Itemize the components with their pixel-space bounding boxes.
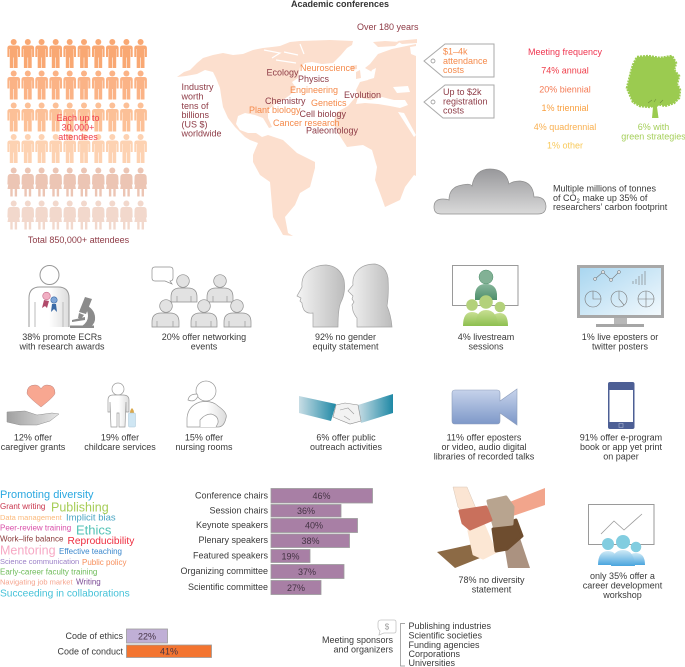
attendees per conference label: attendees [58, 132, 98, 142]
caregiver caption: 12% offer [14, 432, 52, 442]
word cloud: career topics: Navigating job market [0, 578, 73, 586]
meeting frequency list: 1% other [547, 140, 583, 150]
e-program caption: 91% offer e-program [580, 432, 662, 442]
carbon footprint text: researchers’ carbon footprint [553, 202, 668, 212]
icon: head profiles [297, 264, 392, 327]
sponsors label: and organizers [333, 644, 393, 654]
nursing caption: 15% offer [185, 432, 223, 442]
bar chart: women representation: Scientific committee [188, 582, 268, 592]
livestream caption [458, 332, 514, 352]
career workshop caption: only 35% offer a [590, 571, 655, 581]
bar chart: women representation: 46% [312, 491, 331, 501]
icon: career workshop [588, 504, 654, 566]
video caption: or video, audio digital [441, 442, 527, 452]
diversity caption: statement [472, 584, 512, 594]
meeting frequency list [528, 47, 603, 150]
bar chart: women representation: Featured speakers [193, 550, 268, 560]
bar chart: women representation: 19% [281, 552, 300, 562]
industry value label: Industry [182, 82, 214, 92]
diversity caption [458, 575, 525, 594]
bar chart: women representation: Session chairs [209, 506, 268, 516]
bar chart: women representation: Organizing committee [180, 566, 268, 576]
word cloud: career topics: Early-career faculty training [0, 568, 97, 576]
word cloud: career topics: Succeeding in collaborations [0, 588, 130, 600]
disciplines on map [249, 63, 381, 136]
bar chart: women representation: 27% [287, 583, 305, 593]
awards caption: with research awards [18, 342, 105, 352]
world map [177, 39, 417, 236]
duration label: Over 180 years [357, 22, 419, 32]
bar chart: women representation: 37% [298, 567, 316, 577]
meeting frequency list: 20% biennial [539, 84, 591, 94]
carbon footprint text: Multiple millions of tonnes [553, 184, 657, 194]
word cloud: career topics: Ethics [76, 522, 112, 538]
networking caption: 20% offer networking [162, 332, 246, 342]
outreach caption: 6% offer public [316, 432, 376, 442]
carbon footprint text [553, 184, 668, 212]
disciplines on map: Evolution [344, 90, 381, 100]
word cloud: career topics: Peer-review training [0, 524, 71, 532]
sponsors list: Publishing industries [408, 621, 492, 631]
attendees per conference label [56, 113, 100, 142]
outreach caption [310, 432, 383, 452]
video caption: 11% offer eposters [447, 432, 522, 442]
nursing caption: nursing rooms [175, 442, 233, 452]
bar chart: women representation: Conference chairs [195, 490, 268, 500]
icon: livestream [452, 266, 518, 326]
disciplines on map: Genetics [311, 98, 347, 108]
industry value label [180, 82, 222, 138]
icon: awards scientist [29, 266, 95, 328]
meeting frequency list: Meeting frequency [528, 47, 603, 57]
eposters caption: 1% live eposters or [582, 332, 658, 342]
icon: child with bottle [108, 383, 136, 427]
disciplines on map: Ecology [266, 68, 299, 78]
gender equity caption: equity statement [312, 342, 379, 352]
disciplines on map: Plant biology [249, 105, 301, 115]
icon: dollar speech bubble: $ [385, 622, 390, 632]
e-program caption: on paper [603, 452, 639, 462]
nursing caption [175, 432, 233, 452]
sponsors list: Corporations [408, 649, 461, 659]
bar chart: women representation [180, 488, 372, 594]
bar chart: women representation: Plenary speakers [198, 535, 268, 545]
carbon footprint text: make up 35% of [580, 193, 648, 203]
meeting frequency list: 1% triennial [541, 103, 589, 113]
bar chart: women representation: 40% [305, 520, 323, 530]
tag: registration costs: costs [443, 106, 465, 116]
caregiver caption [1, 432, 66, 452]
industry value label: billions [182, 110, 210, 120]
livestream caption: 4% livestream [458, 332, 514, 342]
industry value label: worth [180, 92, 204, 102]
awards caption: 38% promote ECRs [22, 332, 102, 342]
meeting frequency list: 74% annual [541, 66, 589, 76]
caregiver caption: caregiver grants [1, 442, 66, 452]
sponsors label [322, 635, 393, 654]
icon: networking people [152, 267, 251, 327]
meeting frequency list: 4% quadrennial [534, 122, 596, 132]
bar chart: code of ethics and conduct: Code of ethics [65, 631, 123, 641]
bar chart: code of ethics and conduct: 41% [160, 646, 178, 656]
industry value label: tens of [182, 101, 209, 111]
icon: video camera [452, 389, 517, 425]
icon: clasped hands [437, 487, 545, 568]
bar chart: code of ethics and conduct: Code of conduct [57, 646, 123, 656]
tag: attendance costs: costs [443, 65, 465, 75]
awards caption [18, 332, 105, 352]
disciplines on map: Physics [298, 74, 330, 84]
word cloud: career topics [0, 489, 135, 600]
word cloud: career topics: Promoting diversity [0, 489, 94, 501]
eposters caption: twitter posters [592, 342, 649, 352]
attendees per conference label: Each up to [56, 113, 100, 123]
green strategies label [621, 122, 685, 142]
networking caption [162, 332, 246, 352]
bar chart: code of ethics and conduct [57, 629, 212, 658]
bar chart: women representation: Keynote speakers [196, 520, 268, 530]
video caption: libraries of recorded talks [434, 452, 535, 462]
sponsors list: Scientific societies [408, 630, 483, 640]
icon: nursing mother [187, 381, 226, 427]
attendees per conference label: 30,000+ [62, 122, 94, 132]
e-program caption [580, 432, 663, 462]
icon: dollar speech bubble [378, 620, 396, 635]
diversity caption: 78% no diversity [458, 575, 525, 585]
childcare caption: childcare services [84, 442, 156, 452]
e-program caption: book or app yet print [580, 442, 663, 452]
word cloud: career topics: Data management [0, 513, 63, 522]
bar chart: women representation: 36% [297, 506, 315, 516]
icon: handshake [299, 394, 393, 424]
industry value label: worldwide [180, 128, 222, 138]
tag: registration costs: registration [443, 96, 488, 106]
disciplines on map: Chemistry [265, 96, 306, 106]
total attendees label: Total 850,000+ attendees [28, 235, 130, 245]
icon: cloud [434, 169, 546, 214]
livestream caption: sessions [468, 342, 504, 352]
sponsors list [408, 621, 492, 667]
video caption [434, 432, 535, 462]
disciplines on map: Paleontology [306, 126, 359, 136]
green strategies label: green strategies [621, 132, 685, 142]
tag: attendance costs: $1–4k [443, 46, 468, 56]
tag: attendance costs [424, 44, 494, 77]
word cloud: career topics: Science communication [0, 557, 79, 566]
disciplines on map: Cell biology [300, 109, 347, 119]
bracket [400, 624, 405, 666]
green strategies label: 6% with [638, 122, 669, 132]
childcare caption: 19% offer [101, 432, 139, 442]
word cloud: career topics: Implicit bias [66, 512, 116, 524]
industry value label: (US $) [182, 120, 208, 130]
word cloud: career topics: Work–life balance [0, 534, 64, 544]
childcare caption [84, 432, 156, 452]
tag: registration costs [424, 85, 494, 118]
tag: registration costs: Up to $2k [443, 87, 482, 97]
disciplines on map: Engineering [290, 85, 338, 95]
icon: tree [627, 56, 680, 118]
sponsors label: Meeting sponsors [322, 635, 393, 645]
eposters caption [582, 332, 658, 352]
gender equity caption: 92% no gender [315, 332, 376, 342]
word cloud: career topics: Writing [76, 578, 101, 586]
outreach caption: outreach activities [310, 442, 383, 452]
carbon footprint text: 2 [577, 199, 581, 205]
icon: monitor with eposters [577, 265, 664, 327]
icon: smartphone [608, 382, 634, 429]
sponsors list: Funding agencies [408, 640, 480, 650]
word cloud: career topics: Grant writing [0, 502, 45, 511]
icon: heart in hand [7, 385, 59, 425]
networking caption: events [191, 342, 218, 352]
word cloud: career topics: Mentoring [0, 544, 56, 558]
word cloud: career topics: Public policy [82, 558, 126, 567]
word cloud: career topics: Publishing [51, 500, 109, 514]
career workshop caption: workshop [602, 590, 642, 600]
carbon footprint text: of CO [553, 193, 577, 203]
disciplines on map: Cancer research [273, 118, 340, 128]
career workshop caption [583, 571, 663, 600]
pictogram: attendees [7, 39, 147, 230]
career workshop caption: career development [583, 580, 663, 590]
word cloud: career topics: Effective teaching [59, 547, 122, 556]
bar chart: women representation: 38% [301, 536, 320, 546]
bar chart: code of ethics and conduct: 22% [138, 632, 156, 642]
disciplines on map: Neuroscience [300, 63, 355, 73]
word cloud: career topics: Reproducibility [68, 536, 135, 547]
tag: attendance costs: attendance [443, 56, 488, 66]
gender equity caption [312, 332, 379, 352]
